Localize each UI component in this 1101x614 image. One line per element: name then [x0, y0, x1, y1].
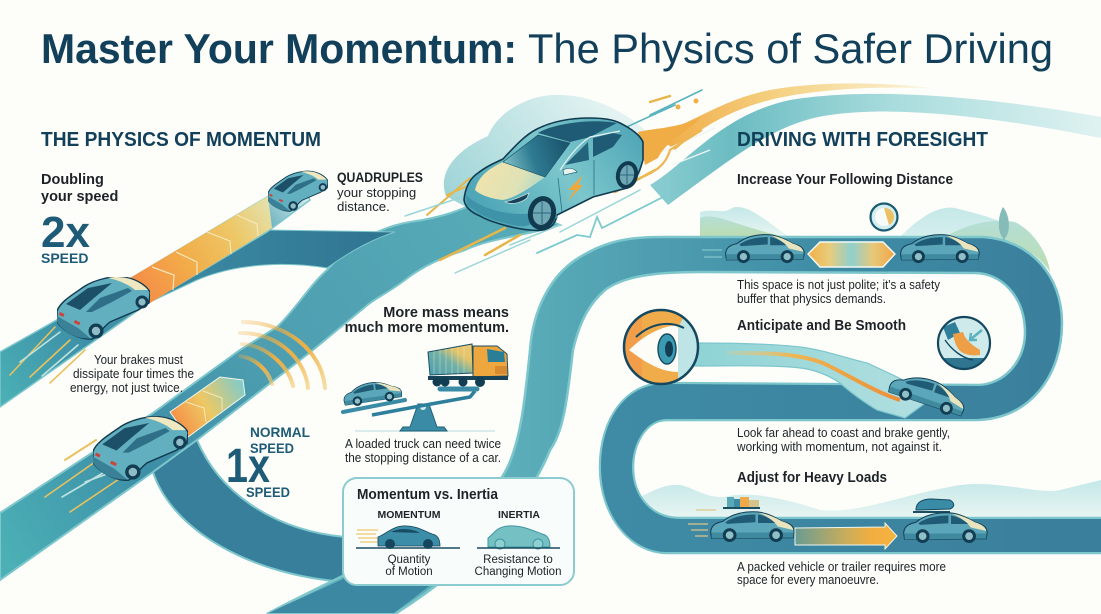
stat 2x: SPEED [41, 250, 88, 266]
mass text [345, 305, 509, 336]
hero car speed lines [405, 90, 702, 273]
doubling speed text [41, 172, 118, 205]
car: normal speed car [93, 417, 188, 480]
momentum column [356, 509, 460, 578]
roof load [723, 497, 760, 508]
road: lower left up to hero car [0, 195, 560, 580]
stat 1x: NORMAL [250, 424, 310, 440]
brakes text: Your brakes must [94, 352, 183, 367]
car: following front [901, 235, 979, 263]
quadruples text: distance. [337, 199, 390, 214]
title: Master Your Momentum: [41, 25, 517, 72]
icon: eye [622, 308, 700, 386]
speed lines heavy car [688, 510, 716, 536]
inertia column: INERTIA [498, 509, 540, 521]
icon: sound arcs [240, 322, 325, 388]
icon: bolt on car door [567, 175, 583, 202]
car: small distant car [268, 171, 328, 211]
car on scale [342, 379, 403, 408]
momentum bar 1x [170, 377, 245, 437]
doubling speed text: your speed [41, 189, 118, 205]
stat 2x: 2x [41, 208, 90, 257]
icon: scale with car and truck [342, 344, 508, 431]
flame dots [676, 98, 698, 110]
quadruples text: your stopping [337, 185, 416, 200]
car: smooth braking [887, 368, 969, 420]
momentum bar 2x [130, 196, 272, 303]
inertia column: Resistance to [483, 554, 553, 566]
speed lines car 1 [10, 327, 85, 383]
top swoosh [650, 83, 1101, 205]
panel: momentum vs inertia [343, 478, 574, 585]
stat 1x [226, 424, 310, 500]
panel heading: Momentum vs. Inertia [357, 486, 499, 503]
car: following rear [726, 235, 804, 263]
hills bottom road [640, 480, 1101, 518]
quadruples text [337, 170, 423, 214]
momentum column: of Motion [385, 566, 433, 578]
heavy text: space for every manoeuvre. [737, 572, 879, 587]
mass text: More mass means [383, 305, 509, 321]
section heading right: DRIVING WITH FORESIGHT [737, 129, 988, 151]
stat 1x: SPEED [250, 440, 294, 456]
speed lines car 2 [45, 440, 122, 512]
heavy text: A packed vehicle or trailer requires more [737, 559, 946, 574]
anticipate heading: Anticipate and Be Smooth [737, 318, 906, 334]
doubling speed text: Doubling [41, 172, 104, 188]
inertia column [475, 509, 561, 578]
car: loaded [711, 512, 794, 542]
road: dark loop [153, 440, 345, 582]
following distance heading: Increase Your Following Distance [737, 172, 953, 188]
road: smooth light lane [695, 343, 935, 418]
following text [737, 277, 940, 306]
road: dark branch [150, 230, 395, 302]
following text: buffer that physics demands. [737, 291, 886, 306]
road: main serpentine [267, 237, 1101, 614]
hero wheels [525, 159, 641, 233]
heavy loads heading: Adjust for Heavy Loads [737, 470, 887, 486]
brakes text: dissipate four times the [73, 366, 194, 381]
clouds behind hero car [444, 95, 645, 215]
road: lower serpentine shade [601, 384, 1101, 552]
hills top road [700, 207, 1050, 272]
flame behind car [638, 117, 700, 165]
mass text: much more momentum. [345, 320, 509, 336]
flame lightning [640, 130, 702, 178]
arrow: safe gap [808, 242, 895, 267]
momentum column: MOMENTUM [378, 509, 441, 521]
section heading left: THE PHYSICS OF MOMENTUM [41, 129, 321, 151]
inertia column: Changing Motion [475, 566, 561, 578]
icon: pedal foot [935, 317, 993, 372]
anticipate text: working with momentum, not against it. [736, 439, 942, 454]
heavy text [737, 559, 946, 587]
car: with roof box [904, 513, 987, 543]
title [41, 25, 1053, 72]
anticipate text: Look far ahead to coast and brake gently, [737, 425, 950, 440]
car: hero car [464, 118, 643, 233]
truck caption [345, 436, 501, 465]
brakes text: energy, not just twice. [70, 380, 183, 395]
road: upper diagonal [0, 178, 310, 407]
following cars lines [702, 250, 722, 257]
arrow: longer distance [795, 523, 897, 549]
quadruples text: QUADRUPLES [337, 170, 423, 185]
roof box [913, 499, 954, 512]
icon: clock [870, 204, 898, 230]
truck caption: the stopping distance of a car. [345, 450, 501, 465]
truck on scale [428, 344, 508, 387]
stat 1x: 1x [226, 440, 270, 493]
car: fast car on upper road [57, 277, 150, 339]
title: The Physics of Safer Driving [528, 25, 1053, 72]
momentum column: Quantity [388, 554, 431, 566]
road: bottom segment shade [269, 530, 480, 613]
brakes text [70, 352, 194, 395]
orange trail [727, 353, 900, 400]
following text: This space is not just polite; it's a safety [737, 277, 940, 292]
anticipate text [736, 425, 950, 454]
truck caption: A loaded truck can need twice [345, 436, 501, 451]
stat 1x: SPEED [246, 484, 290, 500]
